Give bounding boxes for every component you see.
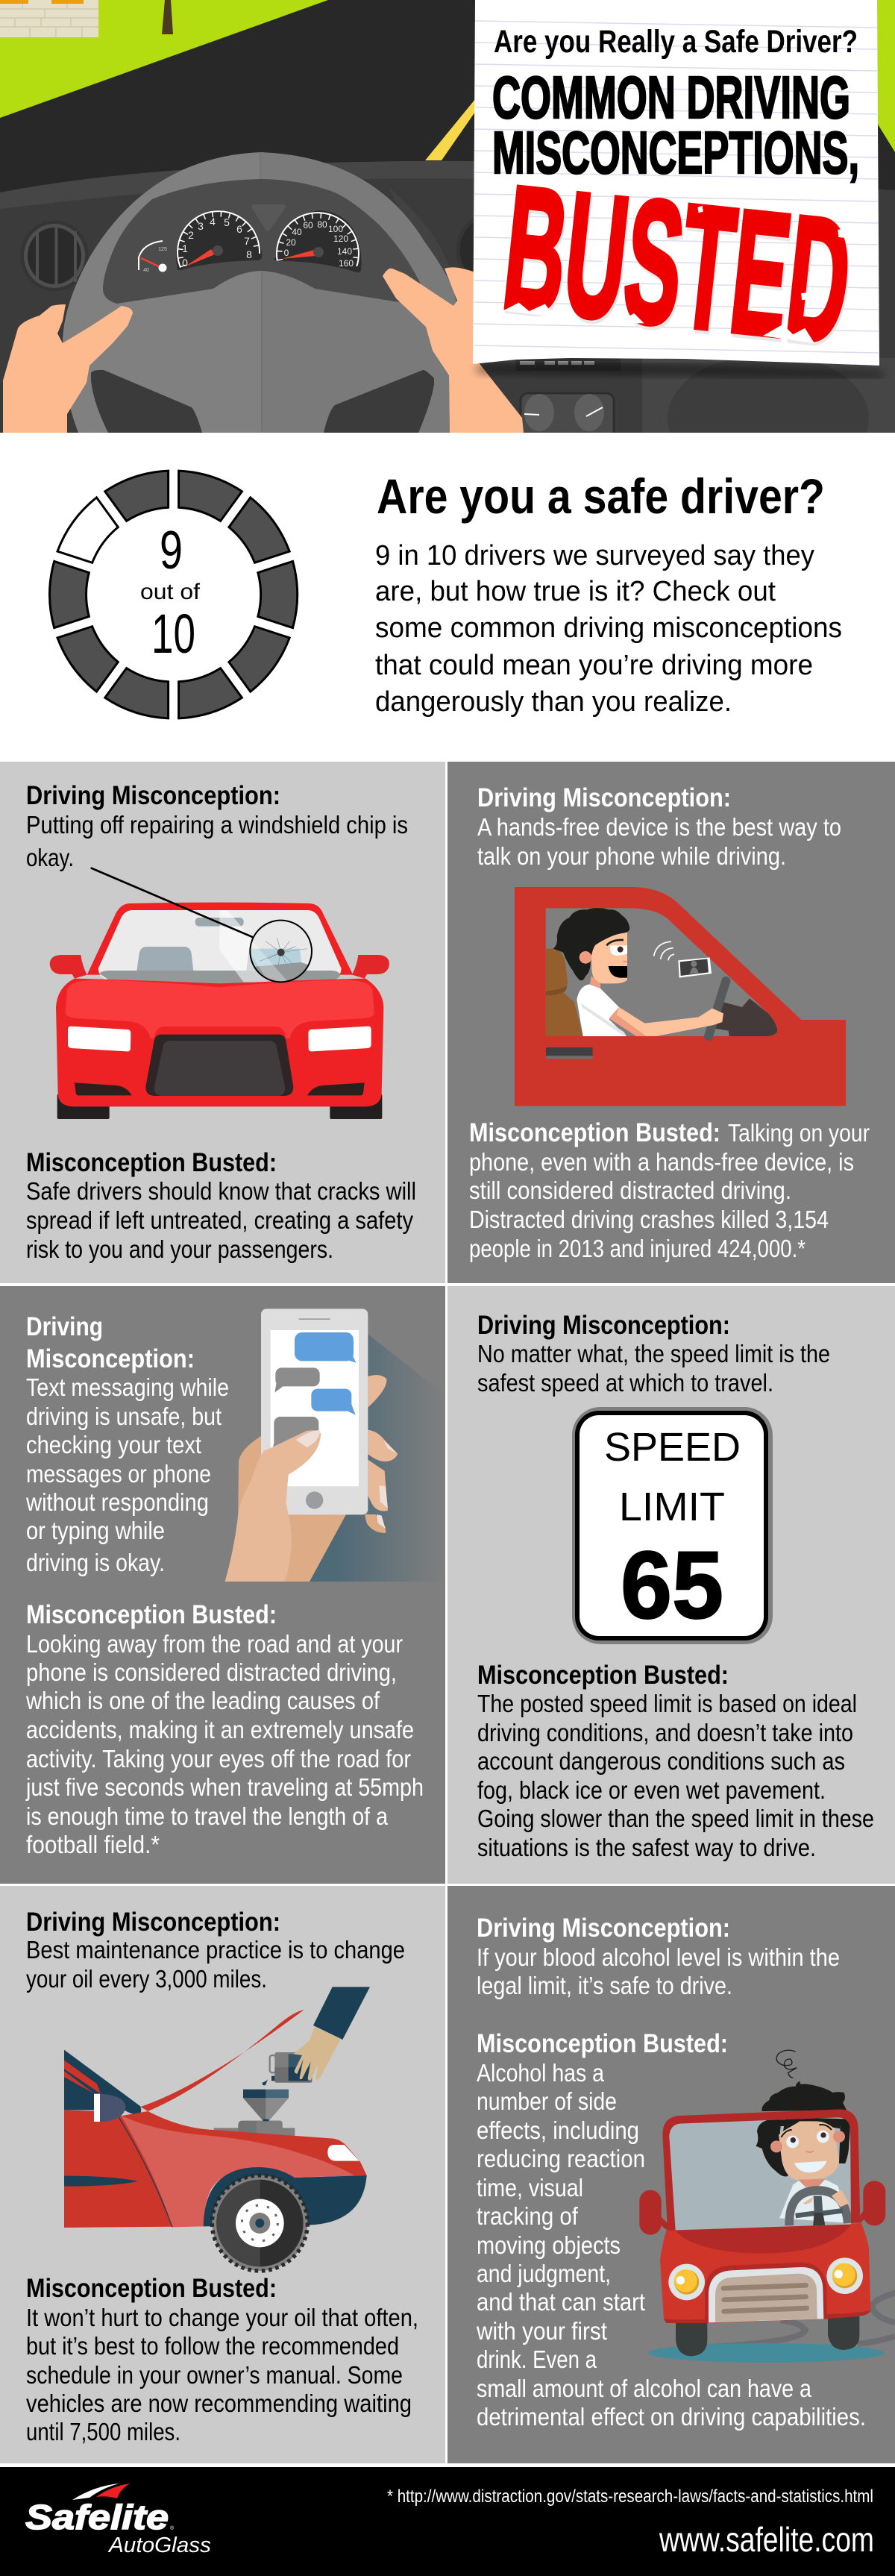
busted text: effects, including [477,2116,639,2144]
logo: Safelite AutoGlass: ® [170,2525,175,2531]
busted text [25,1600,424,1858]
busted text: small amount of alcohol can have a [477,2375,812,2402]
busted text: Misconception Busted: [477,1661,729,1690]
misconception text: driving is okay. [26,1549,165,1576]
busted text: moving objects [477,2231,621,2259]
icon: fuel gauge: 40 [143,268,149,273]
panel: blood alcohol [448,1886,895,2463]
icon: tachometer: 2 [188,229,194,241]
misconception text [26,781,408,871]
icon: left hand [3,304,133,433]
ring chart: 9 out of 10: out of [140,580,201,604]
misconception text: Best maintenance practice is to change [26,1936,405,1964]
icon: tachometer: 5 [224,216,230,228]
misconception text: your oil every 3,000 miles. [26,1965,267,1993]
misconception text: Driving Misconception: [477,1914,730,1943]
busted text: Misconception Busted: [469,1118,720,1147]
misconception text: okay. [26,844,74,871]
busted text: vehicles are now recommending waiting [26,2389,412,2417]
icon: brick building [0,0,98,37]
busted text: Alcohol has a [477,2059,605,2087]
paper shadow [477,364,885,377]
icon: fuel gauge: 125 [158,247,167,252]
icon: speedometer: 80 [317,219,327,230]
icon: speed limit 65 sign: LIMIT [619,1485,725,1529]
busted text: Misconception Busted: [26,1600,277,1629]
icon: steering wheel [63,152,456,433]
ring chart: 9 out of 10: 9 [160,521,183,580]
icon: tachometer: 3 [198,220,204,232]
intro text: that could mean you’re driving more [375,650,813,681]
busted text: spread if left untreated, creating a safety [26,1206,413,1234]
misconception text: messages or phone [26,1460,211,1488]
misconception text: Driving Misconception: [26,781,280,810]
main title [492,64,859,186]
icon: tachometer: 0 [182,257,188,269]
intro text: are, but how true is it? Check out [375,576,776,607]
panel: checking text messages [0,1286,445,1884]
misconception text: A hands-free device is the best way to [477,813,841,841]
illustration: drunk driver in red car [639,2050,895,2363]
panel: windshield chip [0,762,445,1283]
icon: tree trunk [162,0,173,34]
busted text: accidents, making it an extremely unsafe [26,1716,414,1743]
busted text: still considered distracted driving. [469,1176,791,1204]
illustration: driver on hands-free phone [515,887,846,1106]
icon: speedometer: 100 [328,224,343,234]
busted text: just five seconds when traveling at 55mph [25,1773,424,1801]
icon: speedometer: 120 [333,234,348,244]
misconception text: Driving [26,1312,103,1341]
busted text: football field.* [26,1831,160,1858]
illustration: hand holding phone [225,1309,445,1582]
misconception text: Putting off repairing a windshield chip is [26,811,408,839]
busted text: with your first [476,2317,607,2345]
icon: tachometer: 8 [246,248,252,260]
busted text: schedule in your owner’s manual. Some [26,2361,403,2389]
busted text [477,1661,874,1861]
busted text: risk to you and your passengers. [26,1235,333,1263]
icon: dizzy spiral [776,2050,797,2078]
icon: fuel gauge [139,241,167,273]
busted text: Misconception Busted: [26,2274,277,2303]
icon: tachometer: 7 [244,235,250,247]
busted text: Misconception Busted: [26,1148,277,1177]
misconception text [477,783,841,870]
busted text: which is one of the leading causes of [25,1687,380,1714]
misconception text: talk on your phone while driving. [477,842,786,870]
heading: Are you a safe driver? [377,468,825,524]
misconception text [26,1908,405,1993]
busted text: fog, black ice or even wet pavement. [477,1776,826,1804]
icon: speedometer: 20 [286,237,296,248]
misconception text: Misconception: [26,1344,195,1373]
icon: speedometer: 160 [339,258,354,269]
busted text: phone is considered distracted driving, [26,1658,397,1686]
intro section [0,433,895,761]
icon: oil can and hand [263,1987,370,2085]
intro text: dangerously than you realize. [375,686,732,718]
icon: tachometer: 1 [182,242,188,254]
busted text: drink. Even a [477,2345,597,2373]
busted text [26,2274,418,2445]
title card: torn notepaper [473,0,879,383]
icon: speedometer: 40 [292,227,302,237]
icon: speedometer [274,210,362,272]
busted text: tracking of [477,2202,579,2230]
misconception text: checking your text [26,1431,201,1458]
icon: speedometer: 140 [337,246,352,257]
intro text [375,540,842,718]
busted text: situations is the safest way to drive. [477,1834,816,1861]
busted text: Safe drivers should know that cracks will [26,1177,416,1205]
misconception text [25,1312,229,1576]
intro text: 9 in 10 drivers we surveyed say they [375,540,814,571]
busted text [469,1118,870,1262]
icon: front wheel [212,2175,307,2271]
road centre line [425,99,475,160]
busted text: activity. Taking your eyes off the road for [26,1745,411,1773]
busted text: Distracted driving crashes killed 3,154 [469,1206,829,1233]
busted text: and that can start [477,2288,645,2316]
busted text: is enough time to travel the length of a [26,1802,389,1830]
busted text [26,1148,416,1263]
misconception text: Driving Misconception: [477,783,731,812]
intro text: some common driving misconceptions [375,612,842,644]
busted text: number of side [477,2087,617,2115]
dashboard [0,161,895,433]
illustration: red car with chipped windshield [50,868,389,1119]
icon: tachometer [176,210,262,270]
busted text: account dangerous conditions such as [477,1747,845,1775]
misconception text: driving is unsafe, but [26,1403,222,1430]
panel: oil change [0,1886,445,2463]
icon: left air vent [24,224,85,288]
roadside grass [0,0,895,152]
misconception text: No matter what, the speed limit is the [477,1340,830,1367]
panel: hands-free device [448,762,895,1283]
busted text: reducing reaction [477,2145,645,2172]
busted text: Talking on your [728,1119,870,1147]
misconception text: without responding [25,1488,209,1516]
callout: magnified chip [91,868,313,983]
footer [0,2467,895,2576]
icon: tachometer: 4 [210,216,216,228]
misconception text: safest speed at which to travel. [477,1369,773,1397]
busted text: people in 2013 and injured 424,000.* [469,1235,806,1262]
busted text: time, visual [477,2174,583,2201]
icon: tachometer: 6 [236,223,242,235]
icon: speedometer: 0 [284,248,289,258]
misconception text [477,1914,840,1999]
driver figure [756,2117,850,2227]
icon: speed limit 65 sign [572,1407,773,1644]
logo: Safelite AutoGlass [25,2483,211,2557]
busted text: Misconception Busted: [477,2029,728,2058]
icon: right air vent [459,222,474,272]
busted text [476,2029,866,2431]
logo: Safelite AutoGlass: AutoGlass [107,2533,211,2557]
ring chart: 9 out of 10 [34,454,313,735]
busted text: but it’s best to follow the recommended [26,2332,399,2360]
misconception text: or typing while [26,1517,165,1544]
illustration: oil being poured into car [64,1987,370,2271]
hero illustration: driver's view from the cockpit [0,0,895,433]
busted text: It won’t hurt to change your oil that often, [26,2304,418,2331]
busted text: and judgment, [477,2260,611,2287]
ring chart: 9 out of 10: 10 [151,603,195,665]
misconception text [477,1311,830,1397]
icon: speed limit 65 sign: 65 [621,1532,723,1639]
icon: speed limit 65 sign: SPEED [604,1425,741,1470]
icon: speedometer: 60 [303,220,313,231]
busted text: until 7,500 miles. [26,2418,180,2445]
icon: funnel [243,2090,289,2121]
busted text: Looking away from the road and at your [26,1630,403,1658]
logo: Safelite AutoGlass: Safelite [25,2498,169,2536]
icon: phone with signal waves [654,941,712,978]
misconception text: legal limit, it’s safe to drive. [477,1972,732,1999]
misconception text: Driving Misconception: [26,1908,280,1937]
misconception text: Text messaging while [26,1373,229,1401]
icon: right hand [383,267,524,433]
misconception text: Driving Misconception: [477,1311,730,1340]
misconception text: If your blood alcohol level is within the [477,1943,840,1971]
panel: speed limit [448,1286,895,1884]
